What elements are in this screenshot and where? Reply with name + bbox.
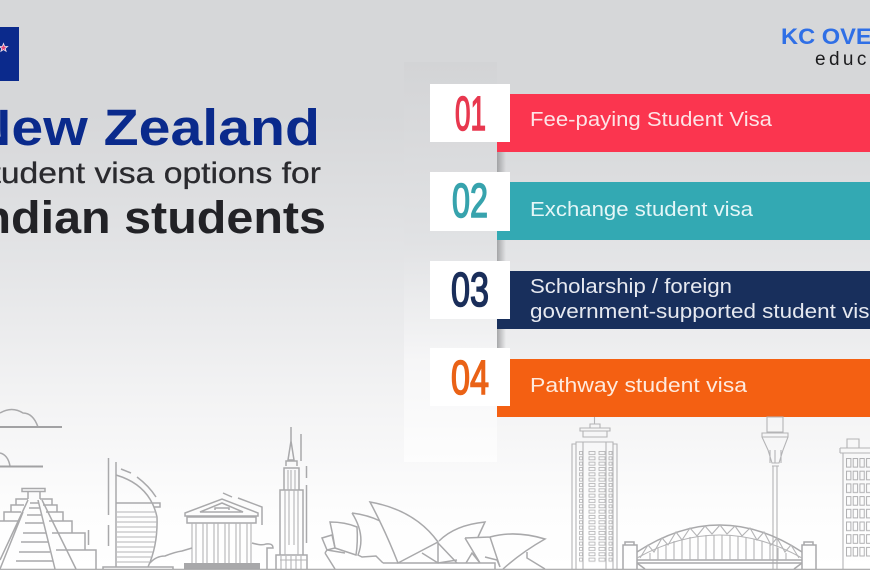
item 02	[430, 172, 870, 240]
icon: skyscraper	[276, 427, 307, 569]
title	[0, 99, 326, 243]
item 03	[430, 261, 870, 329]
item 02: Exchange student visa	[530, 199, 754, 221]
item 04	[430, 348, 870, 417]
ground line	[0, 568, 870, 570]
icon: harbour bridge	[623, 525, 816, 569]
item 03: 03	[451, 264, 489, 317]
icon: office building	[840, 439, 870, 569]
icon: sail-shaped hotel	[103, 458, 173, 569]
item 01: Fee-paying Student Visa	[530, 109, 773, 131]
icon: opera house	[322, 502, 545, 569]
item 04: Pathway student visa	[530, 375, 748, 397]
icon: Sydney tower	[762, 417, 788, 569]
panel: numbered column backdrop	[404, 62, 506, 462]
item 01	[430, 84, 870, 152]
item 03: government-supported student visa	[530, 301, 870, 323]
icon: classical temple	[150, 493, 273, 569]
icon: clouds	[0, 410, 62, 466]
icon: New Zealand flag	[0, 27, 19, 81]
item 01: 01	[455, 88, 486, 141]
icon: apartment tower	[572, 417, 617, 569]
logo	[781, 24, 870, 70]
item 02: 02	[452, 175, 488, 228]
item 04: 04	[451, 352, 489, 405]
item 03: Scholarship / foreign	[530, 276, 732, 298]
icon: stepped pyramid	[0, 488, 96, 569]
